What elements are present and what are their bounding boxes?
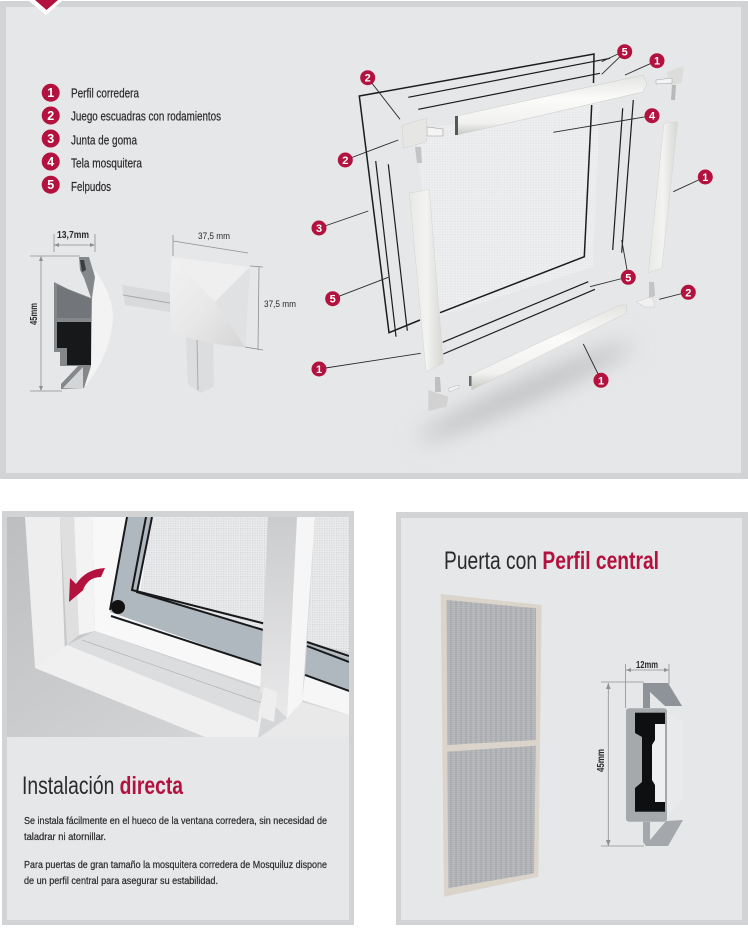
callout 5 left (325, 291, 340, 306)
callout 1 lower left: 1 (316, 364, 322, 376)
legend item 5 (42, 176, 111, 194)
callout 3: 3 (316, 223, 322, 235)
callout 2 lower right: 2 (685, 287, 691, 299)
corner bracket with dimensions: 37,5 mm (264, 299, 296, 310)
body text: de un perfil central para asegurar su estabilidad. (24, 876, 218, 887)
door illustration (441, 594, 542, 897)
callout 2 upper left (360, 70, 375, 85)
callout 3 (312, 220, 326, 236)
right profile bar (648, 122, 678, 273)
panel: door with central profile (396, 512, 748, 925)
legend item 3: Junta de goma (71, 134, 137, 148)
body text: taladrar ni atornillar. (24, 832, 106, 843)
callout 5 top (617, 44, 632, 59)
bottom-right corner bracket (636, 282, 655, 307)
callout 1 lower left (312, 362, 326, 376)
callout 5 lower right (621, 270, 636, 285)
legend item 5: 5 (47, 178, 54, 192)
roller (111, 600, 125, 614)
arrow: tilt direction (69, 568, 105, 602)
callout 1 right: 1 (702, 172, 708, 184)
callout 1 top right: 1 (654, 56, 660, 68)
top-left corner bracket (402, 118, 443, 163)
legend item 2: Juego escuadras con rodamientos (71, 110, 221, 124)
central profile cross-section with dimensions (595, 659, 683, 846)
legend item 4: Tela mosquitera (71, 156, 142, 170)
callout 2 lower right (681, 285, 696, 300)
central profile cross-section with dimensions: 12mm (636, 659, 658, 671)
screen aluminium frame (110, 517, 270, 668)
panel: exploded view of components (0, 0, 748, 479)
top-right corner bracket (656, 66, 684, 100)
legend item 4: 4 (47, 155, 54, 169)
screen mesh (140, 517, 270, 632)
bottom-left corner bracket (428, 377, 459, 411)
central profile cross-section with dimensions: 45mm (595, 749, 607, 772)
legend item 1: Perfil corredera (71, 86, 139, 100)
callout 5 lower right: 5 (625, 272, 631, 284)
body text (24, 816, 327, 887)
heading: Puerta con Perfil central: Puerta con Perfil central (444, 547, 659, 575)
legend item 4 (42, 152, 142, 170)
callout 1 bottom (594, 373, 608, 388)
callout 1 bottom: 1 (598, 375, 604, 387)
shadow (413, 335, 637, 449)
exploded window diagram (359, 54, 684, 449)
legend item 5: Felpudos (71, 180, 111, 194)
post (260, 517, 297, 718)
corner bracket with dimensions (122, 231, 296, 393)
legend item 2 (42, 106, 221, 124)
felt strips (376, 58, 633, 354)
bottom profile bar (469, 305, 627, 390)
callout 5 left: 5 (330, 294, 336, 306)
body text: Se instala fácilmente en el hueco de la ventana corredera, sin necesidad de (24, 816, 327, 827)
profile cross-section with dimensions: 45mm (28, 303, 40, 325)
legend item 1: 1 (47, 86, 54, 100)
legend (42, 84, 221, 194)
heading: Instalación directa: Instalación directa (22, 772, 184, 800)
mesh fabric (415, 102, 600, 317)
callout 2 upper left: 2 (365, 73, 371, 85)
body text: Para puertas de gran tamaño la mosquitera corredera de Mosquiluz dispone (24, 860, 327, 871)
legend item 3 (42, 130, 137, 148)
callout 1 right (698, 170, 713, 184)
legend item 1 (42, 84, 139, 102)
corner bracket with dimensions: 37,5 mm (198, 231, 230, 242)
top profile bar (455, 75, 647, 135)
profile cross-section with dimensions (28, 229, 113, 391)
profile cross-section with dimensions: 13,7mm (57, 229, 89, 241)
callout 4: 4 (649, 111, 656, 123)
top marker: red chevron (28, 0, 63, 15)
rubber gasket (359, 54, 594, 333)
photo: window installation (7, 517, 349, 737)
callout lines (319, 53, 705, 380)
callout 4 (644, 108, 660, 123)
callout 2 left (338, 152, 353, 168)
legend item 3: 3 (47, 132, 54, 146)
callout 2 left: 2 (342, 155, 348, 167)
callout 1 top right (650, 53, 664, 68)
panel: direct installation (2, 511, 354, 925)
callout 5 top: 5 (622, 47, 628, 59)
legend item 2: 2 (47, 109, 54, 123)
left profile bar (409, 190, 443, 372)
